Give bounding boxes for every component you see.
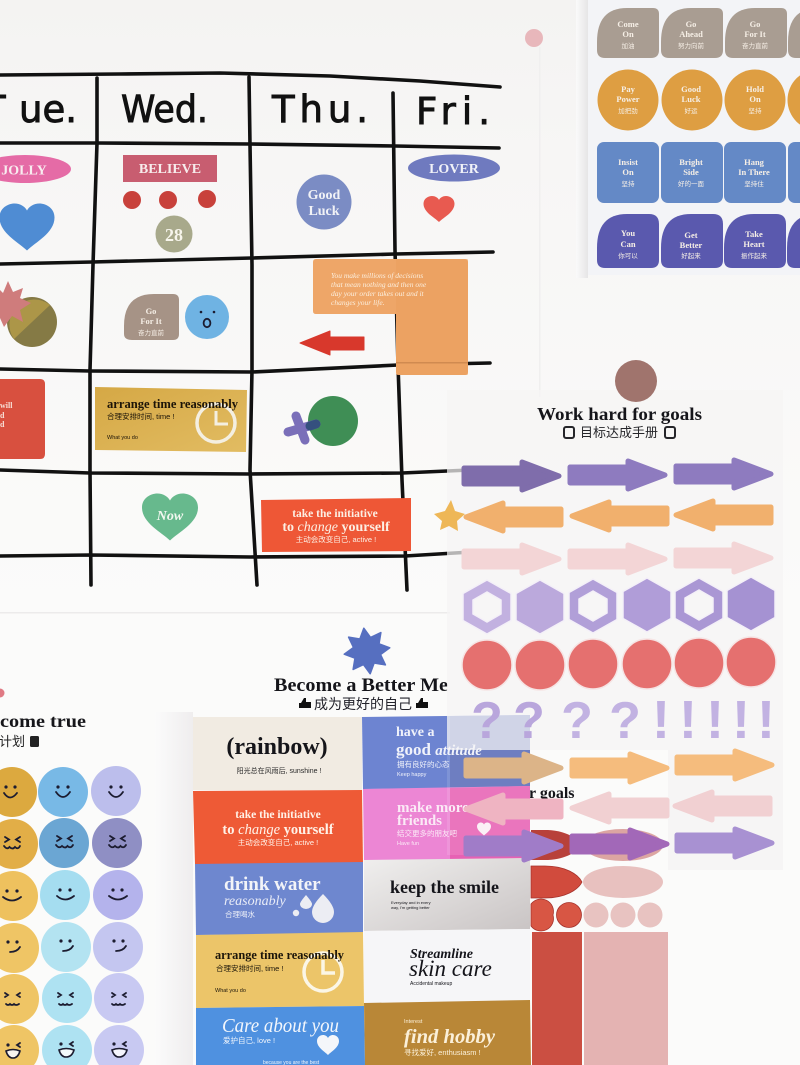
card: good attitude: have a <box>396 725 434 740</box>
sticker: Jolly: JOLLY <box>1 164 47 178</box>
sheet labels: 坚持 <box>748 106 762 115</box>
card: streamline skin care: Streamline <box>410 947 473 962</box>
pushpin: pink <box>525 29 543 47</box>
question and exclamation marks: ? <box>513 692 545 750</box>
sheet labels: On <box>622 167 634 177</box>
tan row <box>597 8 800 58</box>
weekday headings: ue. <box>19 88 77 131</box>
sticker: orange note: that mean nothing and then one <box>331 280 427 289</box>
sheet labels: Can <box>620 239 636 249</box>
card: make more friends: friends <box>397 813 442 829</box>
sheet labels: 好起来 <box>681 251 701 260</box>
purple shapes row <box>597 214 800 268</box>
card: find hobby: Interest <box>404 1019 423 1025</box>
arrow: red left arrow <box>300 331 364 355</box>
sheet title: Work hard for goals <box>537 404 702 424</box>
shadow strip beside quote card sheet <box>155 712 193 1065</box>
card: care about you <box>196 1006 365 1065</box>
sheet labels: Heart <box>743 239 765 249</box>
sheet labels: Go <box>750 19 760 29</box>
weekday headings: Wed. <box>121 88 208 131</box>
card: take the initiative: to change yourself <box>222 822 334 838</box>
sticker: Jolly <box>0 155 71 183</box>
orange circles row <box>598 70 800 130</box>
card: make more friends <box>363 786 530 862</box>
column 2 circles <box>38 767 92 1065</box>
card: drink water: drink water <box>224 874 321 895</box>
panel: quote card sheet <box>193 715 531 1065</box>
sticker: three red dots <box>123 190 216 209</box>
star: orange <box>434 500 465 531</box>
card: arrange time reasonably: 合理安排时间, time ! <box>216 963 284 973</box>
sheet labels: Pay <box>621 84 636 94</box>
sheet labels: Power <box>616 94 640 104</box>
heading: Become a Better Me <box>274 675 448 712</box>
sheet labels: Insist <box>618 157 638 167</box>
blue squares row <box>597 142 800 203</box>
sticker: arrange time reasonably: What you do <box>107 435 138 441</box>
card: find hobby: 寻找爱好, enthusiasm ! <box>404 1047 481 1057</box>
sticker: red card cropped: will <box>0 401 13 410</box>
calendar paper sheet <box>0 0 800 613</box>
weekday headings <box>0 88 490 133</box>
sticker: Go For It <box>124 294 179 340</box>
column 1 circles <box>0 767 39 1065</box>
sticker: Go For It: Go <box>146 306 156 316</box>
weekday headings: Thu. <box>271 88 368 131</box>
card: drink water: 合理喝水 <box>225 909 255 919</box>
card: good attitude: good attitude <box>396 740 482 759</box>
sticker: red card cropped: d <box>0 420 5 429</box>
card: find hobby: find hobby <box>404 1026 495 1048</box>
sheet labels: Go <box>686 19 696 29</box>
red strip <box>532 932 582 1065</box>
question and exclamation marks: ? <box>609 692 641 750</box>
card: keep the smile: keep the smile <box>390 877 499 897</box>
card: arrange time reasonably <box>196 932 364 1008</box>
sticker: arrange time reasonably: arrange time reasonably <box>107 397 239 411</box>
card: keep the smile: way, I'm getting better <box>391 905 430 910</box>
sticker: Believe: BELIEVE <box>139 162 201 177</box>
sheet labels: Bright <box>679 157 703 167</box>
sticker: Believe <box>123 155 217 182</box>
card: rainbow <box>193 717 362 790</box>
arrows: lower pink row <box>466 792 770 823</box>
card: keep the smile: Everyday and in every <box>391 900 431 905</box>
card: drink water: reasonably <box>224 894 286 909</box>
sheet labels: Good <box>681 84 701 94</box>
sheet labels: Side <box>683 167 699 177</box>
sheet labels: 努力向前 <box>678 41 704 50</box>
sheet labels: Take <box>745 229 763 239</box>
heading: Become a Better Me: 成为更好的自己 <box>314 696 412 712</box>
smiley faces <box>3 785 127 1058</box>
heading: come true <box>0 711 86 731</box>
sticker: 28 <box>156 216 192 252</box>
arrows: orange row <box>466 501 771 531</box>
sheet labels: 你可以 <box>618 251 638 260</box>
sticker: orange note: day your order takes out and it <box>331 289 425 298</box>
sticker: red heart <box>424 196 454 222</box>
sheet labels: 好运 <box>684 106 698 115</box>
sheet labels: 坚持住 <box>744 179 764 188</box>
card: care about you: 爱护自己, love ! <box>223 1035 275 1045</box>
hexagons row <box>463 577 775 634</box>
question and exclamation marks: ! <box>757 690 775 750</box>
column 3 circles <box>91 766 144 1065</box>
dots row <box>531 899 662 931</box>
panel: red and pink strip stickers <box>531 829 668 1065</box>
heading: Become a Better Me: Become a Better Me <box>274 675 448 696</box>
pink strip <box>584 932 668 1065</box>
sheet labels: Ahead <box>679 29 703 39</box>
sticker: arrange time reasonably: 合理安排时间, time ! <box>107 411 175 421</box>
sheet labels: 好的一面 <box>678 179 704 188</box>
card: make more friends: Have fun <box>397 841 419 847</box>
sticker: Good Luck <box>296 174 352 230</box>
sheet labels: You <box>621 228 635 238</box>
ellipses row 1 <box>531 829 663 861</box>
sheet labels: 奋力直前 <box>742 41 768 50</box>
card: arrange time reasonably: What you do <box>215 988 246 994</box>
sheet labels: Luck <box>682 94 701 104</box>
sheet labels: Come <box>617 19 639 29</box>
question and exclamation marks: ! <box>706 690 724 750</box>
card: take the initiative <box>193 790 363 864</box>
card: make more friends: make more <box>397 800 469 816</box>
sheet title <box>537 404 702 440</box>
question and exclamation marks <box>471 690 775 750</box>
sheet title: 目标达成手册 <box>580 425 658 440</box>
sticker: blue heart <box>0 204 54 250</box>
panel: transparent arrow sheet <box>434 390 783 870</box>
icon: blue burst star <box>341 625 393 677</box>
card: take the initiative: 主动会改变自己, active ! <box>238 837 318 847</box>
sticker: orange note <box>313 259 468 375</box>
sticker: split olive circle <box>7 297 57 347</box>
pushpin: brown <box>615 360 657 402</box>
sheet labels: In There <box>738 167 770 177</box>
ellipses row 2 <box>531 866 663 898</box>
question and exclamation marks: ? <box>561 692 593 750</box>
sheet labels: Hang <box>744 157 765 167</box>
question and exclamation marks: ! <box>679 690 697 750</box>
sheet labels: Get <box>684 230 698 240</box>
sticker: red card cropped: d <box>0 411 5 420</box>
sticker: green heart Now <box>142 494 198 540</box>
circles row <box>462 637 776 690</box>
card: streamline skin care <box>364 929 530 1003</box>
sticker: take the initiative: 主动会改变自己, active ! <box>296 534 376 544</box>
sticker: green circle and purple cross <box>288 396 358 446</box>
arrows: pink row <box>464 544 771 573</box>
question and exclamation marks: ! <box>732 690 750 750</box>
sticker: take the initiative: to change yourself <box>282 520 390 535</box>
caption: your goals partial: r goals <box>529 785 574 802</box>
sticker: 28: 28 <box>165 225 183 245</box>
card: care about you: Care about you <box>222 1015 339 1037</box>
card: good attitude: 拥有良好的心态 <box>397 759 450 769</box>
question and exclamation marks: ? <box>471 692 503 750</box>
card: rainbow: (rainbow) <box>226 734 328 760</box>
sheet labels: On <box>622 29 634 39</box>
arrows: lower purple row <box>466 829 772 860</box>
question and exclamation marks: ! <box>652 690 670 750</box>
heading <box>0 711 86 749</box>
sheet labels: Hold <box>746 84 764 94</box>
card: good attitude <box>362 715 530 789</box>
sheet labels <box>616 19 770 260</box>
sticker: Lover: LOVER <box>429 162 480 177</box>
pushpin: small red <box>0 688 4 698</box>
card: keep the smile <box>364 858 530 931</box>
sheet labels: On <box>749 94 761 104</box>
panel: smiley sticker sheet <box>0 711 144 1065</box>
sticker: red card cropped <box>0 379 45 459</box>
panel: top right sticker sheet <box>576 0 800 278</box>
arrows: lower orange row <box>466 751 772 782</box>
card: rainbow: 阳光总在风雨后, sunshine ! <box>237 766 321 775</box>
sheet labels: Better <box>680 240 703 250</box>
sticker: Good Luck: Good <box>308 188 341 203</box>
card: take the initiative: take the initiative <box>235 809 321 821</box>
sticker: surprised blue face <box>185 295 229 339</box>
card: drink water <box>195 862 363 935</box>
sticker: Good Luck: Luck <box>308 204 340 219</box>
card: find hobby <box>364 1000 531 1065</box>
card: streamline skin care: Accidental makeup <box>410 981 452 987</box>
sticker: pink burst <box>0 281 31 327</box>
calendar grid <box>0 73 500 590</box>
card: arrange time reasonably: arrange time reasonably <box>215 947 344 962</box>
sticker: Go For It: 奋力直前 <box>138 328 164 337</box>
sticker: orange note: You make millions of decisions <box>331 271 423 280</box>
sheet labels: 振作起来 <box>741 251 768 260</box>
sheet labels: 加把劲 <box>618 106 638 115</box>
sticker: Lover <box>408 154 500 182</box>
sticker: take the initiative: take the initiative <box>292 508 378 520</box>
sticker: Go For It: For It <box>140 316 162 326</box>
weekday headings: Fri. <box>416 90 490 133</box>
sticker: arrange time reasonably <box>95 387 247 452</box>
sticker: green heart Now: Now <box>156 509 184 524</box>
sticker: orange note: changes your life. <box>331 298 385 307</box>
sheet labels: 坚持 <box>622 179 635 188</box>
card: streamline skin care: skin care <box>409 956 492 981</box>
sheet labels: 加油 <box>622 41 634 50</box>
arrows: purple row <box>464 460 771 490</box>
sheet labels: For It <box>744 29 766 39</box>
card: good attitude: Keep happy <box>397 772 427 778</box>
sticker: take the initiative <box>261 498 411 552</box>
card: make more friends: 结交更多的朋友吧 <box>397 828 457 838</box>
